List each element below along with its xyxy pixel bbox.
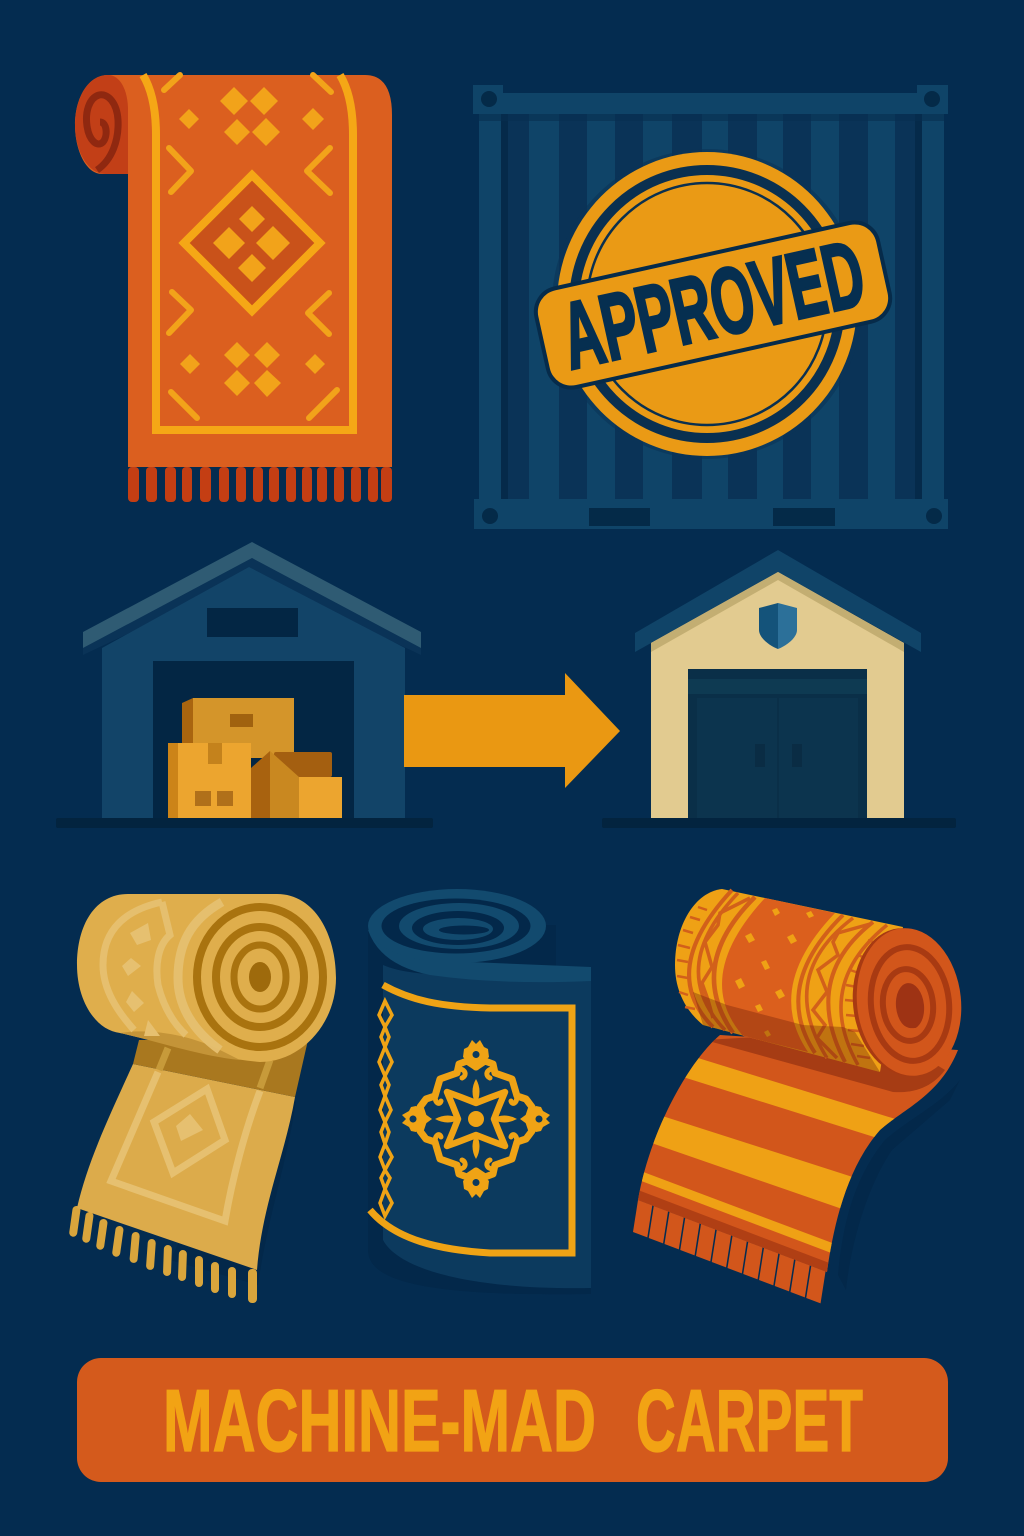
drape stripes: [628, 1058, 905, 1254]
beige fringe: [69, 1205, 257, 1303]
rug gold border: [143, 75, 353, 430]
icon: secure warehouse: [602, 550, 956, 828]
roll shadow: [693, 992, 880, 1072]
striped carpet drape: [638, 1035, 958, 1272]
icon: orange rolled carpet: [75, 75, 392, 502]
icon: shipping container with approved stamp: [473, 85, 948, 529]
medallion tips: [463, 1040, 489, 1070]
drape shadow: [838, 1080, 960, 1290]
roll end spiral: [846, 923, 968, 1081]
roll pattern: [103, 902, 222, 1050]
rug central medallion: [184, 175, 320, 311]
navy rug side diamonds: [379, 1001, 392, 1216]
stamp: approved seal: [552, 149, 862, 459]
icon: navy rolled carpet: [368, 889, 591, 1294]
icon: shield: [759, 603, 797, 649]
box stack: [168, 698, 342, 818]
beige drape pattern: [111, 1072, 260, 1221]
warehouse door: [688, 669, 867, 818]
arrow: [404, 673, 620, 788]
navy rug border: [370, 985, 572, 1253]
container corrugation: [501, 114, 922, 499]
beige roll: [77, 894, 336, 1062]
rug chevrons: [164, 75, 337, 418]
rug diamonds: [179, 87, 325, 397]
icon: orange striped rolled carpet: [620, 889, 968, 1303]
roll end rings: [197, 907, 323, 1047]
title text: CARPET: [636, 1371, 863, 1470]
title text: MACHINE-MAD: [163, 1371, 596, 1470]
roll band lines: [677, 890, 887, 1065]
roll dots: [735, 908, 814, 1037]
striped roll body: [675, 889, 903, 1072]
stamp banner: [533, 216, 893, 393]
striped fringe: [633, 1200, 826, 1303]
navy rug medallion: [402, 1040, 550, 1198]
icon: open warehouse with boxes: [56, 542, 433, 828]
icon: beige rolled carpet: [69, 894, 336, 1303]
title banner: [77, 1358, 948, 1482]
rug fringe: [128, 467, 392, 502]
medallion flower: [447, 1092, 505, 1146]
beige carpet drape: [77, 1064, 295, 1270]
container frame: [473, 85, 948, 114]
navy roll top spiral: [368, 889, 591, 982]
